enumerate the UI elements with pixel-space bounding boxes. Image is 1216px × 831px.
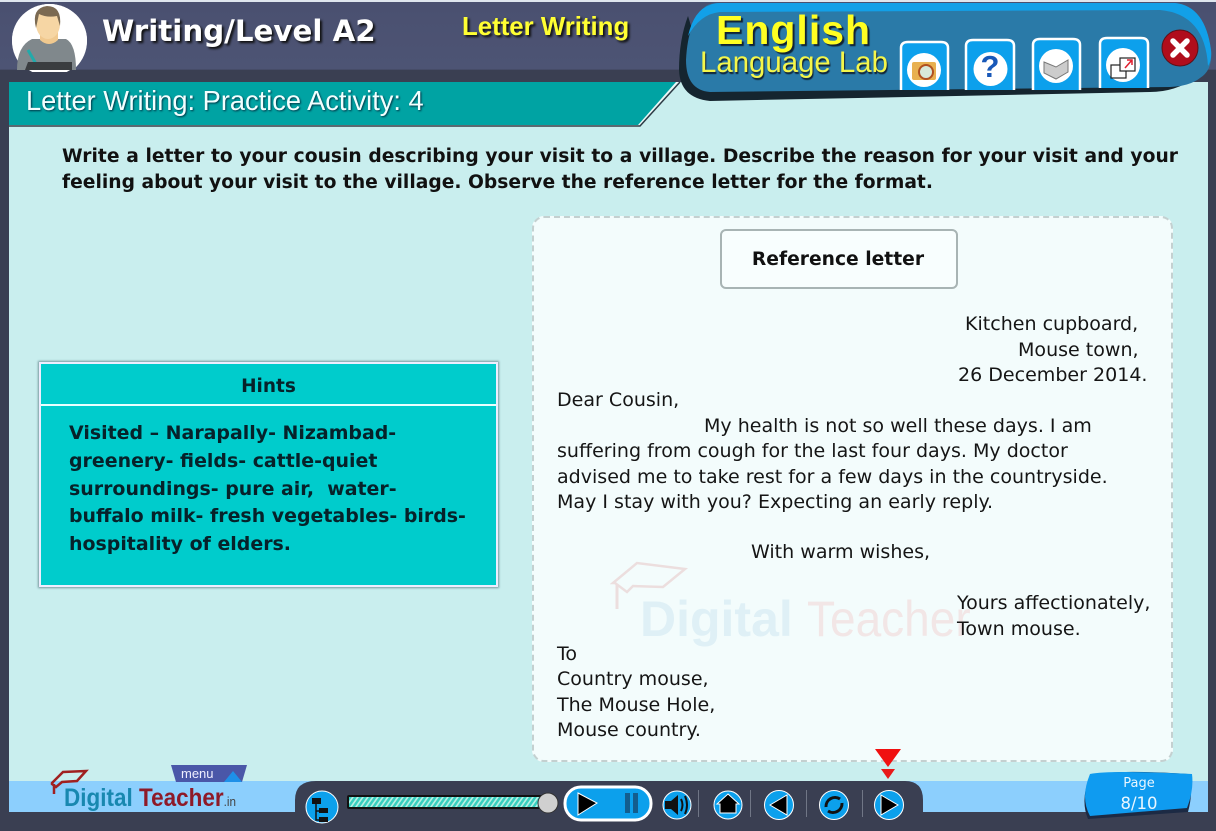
brand: Language Lab: Language Lab: [700, 46, 888, 79]
letter text: Mouse country.: [557, 719, 701, 741]
menu label: menu: [181, 766, 214, 781]
sound button: [663, 791, 691, 819]
heading: Writing/Level A2: Writing/Level A2: [102, 14, 376, 48]
letter text: Mouse town,: [1018, 339, 1139, 361]
instructions: [62, 146, 1178, 193]
reference letter button: Reference letter: [752, 249, 924, 270]
panel: hints: [39, 362, 498, 587]
panel: reference letter: [532, 216, 1173, 762]
letter text: [556, 313, 1150, 741]
letter text: Yours affectionately,: [957, 592, 1150, 614]
letter text: My health is not so well these days. I am: [704, 415, 1092, 437]
watermark logo: Teacher: [807, 591, 970, 647]
Digital Teacher logo: Digital Teacher.in: [64, 784, 236, 812]
outline icon: tree: [306, 791, 338, 823]
play and pause pill: [565, 787, 651, 820]
bottom controls bar: [171, 749, 1192, 824]
close button: [1162, 30, 1198, 66]
next button: [874, 790, 904, 820]
tab buttons: [901, 38, 1148, 90]
progress track: [347, 793, 558, 813]
hints heading: Hints: [241, 376, 296, 397]
letter text: Town mouse.: [957, 618, 1081, 640]
English Language Lab panel: [679, 3, 1212, 101]
back button: [764, 790, 794, 820]
letter text: The Mouse Hole,: [557, 694, 715, 716]
watermark logo: [610, 562, 970, 647]
home button: [714, 791, 742, 819]
page number badge: [1120, 776, 1158, 813]
reference letter button: [720, 229, 958, 289]
letter text: May I stay with you? Expecting an early reply.: [557, 491, 993, 513]
page number badge: Page: [1123, 776, 1155, 791]
instructions: feeling about your visit to the village. Observe the reference letter for the format.: [62, 172, 933, 193]
page number badge: 8/10: [1120, 794, 1158, 813]
menu tab: [171, 765, 247, 782]
letter text: Kitchen cupboard,: [965, 313, 1138, 335]
help icon glyph: ?: [981, 49, 999, 84]
letter text: Dear Cousin,: [557, 389, 679, 411]
avatar icon: learner writing: [12, 4, 87, 72]
letter text: suffering from cough for the last four days. My doctor: [557, 440, 1068, 462]
red arrow marker: [875, 749, 901, 779]
letter text: 26 December 2014.: [958, 364, 1148, 386]
letter text: Country mouse,: [557, 668, 709, 690]
hints heading: [41, 364, 496, 406]
footer blue strip: [9, 781, 1208, 812]
letter text: advised me to take rest for a few days in the countryside.: [557, 466, 1108, 488]
hints text: hospitality of elders.: [69, 533, 291, 555]
hints text: Visited – Narapally- Nizambad-: [69, 422, 396, 444]
activity title banner: [9, 82, 680, 127]
instructions: Write a letter to your cousin describing your visit to a village. Describe the reason for your visit and your: [62, 146, 1178, 167]
letter text: With warm wishes,: [751, 541, 930, 563]
hints text: [69, 422, 466, 555]
activity title text: Letter Writing: Practice Activity: 4: [26, 85, 424, 116]
page badge shape: [1084, 772, 1192, 819]
heading: Letter Writing: Letter Writing: [462, 13, 629, 41]
letter text: To: [557, 643, 577, 665]
watermark logo: Digital: [640, 591, 793, 647]
Digital Teacher logo: [50, 770, 236, 812]
hints text: greenery- fields- cattle-quiet: [69, 450, 377, 472]
header bar: [0, 0, 1216, 82]
hints text: surroundings- pure air, water-: [69, 478, 397, 500]
brand: English: English: [716, 7, 871, 53]
hints text: buffalo milk- fresh vegetables- birds-: [69, 505, 466, 527]
replay button: [820, 790, 848, 820]
